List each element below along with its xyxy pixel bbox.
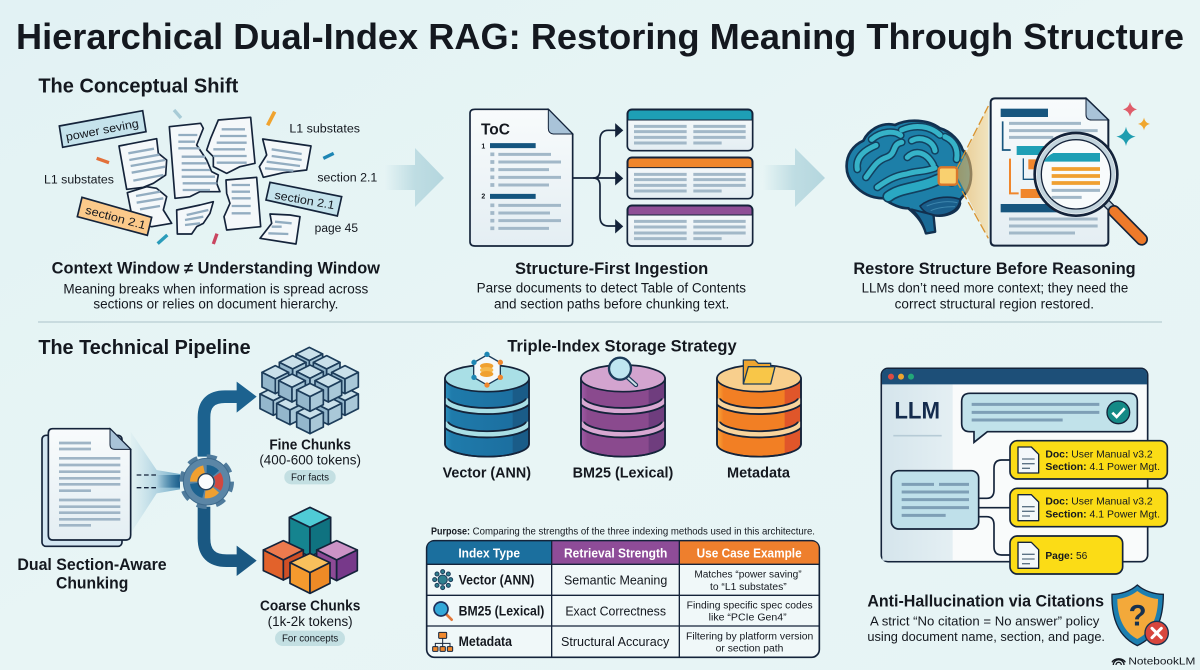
icon: source document: [42, 429, 131, 546]
citation card two: [1010, 488, 1167, 527]
beam from document to gear: [131, 432, 180, 533]
text: fine chunks: [259, 437, 361, 468]
zoom cone: [956, 106, 988, 238]
icon: vector network: [471, 352, 503, 388]
text: restore description: [862, 280, 1128, 311]
text: floating labels: [44, 121, 378, 235]
text: coarse chunks: (1k-2k tokens): [268, 614, 353, 629]
icon: llm window: LLM: [894, 397, 940, 424]
pill: for concepts: [275, 631, 345, 646]
text: context window description: [63, 281, 368, 312]
labels: database names: Metadata: [727, 465, 791, 481]
icon: llm window: [881, 368, 1148, 562]
text: context window description: Meaning breaks when information is spread across: [63, 281, 368, 296]
icon: table of contents document: 1: [481, 143, 485, 150]
icon: shield with question mark: [1112, 585, 1168, 646]
icon: coarse chunk cubes: [263, 507, 357, 593]
text: floating labels: section 2.1: [317, 170, 378, 184]
row: bm25: Exact Correctness: [565, 605, 666, 619]
pill: for facts: [284, 470, 336, 484]
heading: the technical pipeline: The Technical Pipeline: [38, 337, 251, 359]
text: context window description: sections or relies on document hierarchy.: [93, 297, 338, 312]
text: ingestion description: and section paths before chunking text.: [494, 296, 729, 311]
label: power seving: [59, 111, 146, 147]
arrow: shift to ingestion: [385, 148, 444, 207]
icon: magnifier: [609, 358, 636, 385]
text: restore description: LLMs don’t need more context; they need the: [862, 280, 1128, 295]
row: vector: [433, 570, 802, 593]
citation card one: [1010, 441, 1167, 479]
text: citation policy: using document name, section, and page.: [867, 630, 1105, 644]
text: dual section-aware chunking: Chunking: [56, 575, 128, 593]
row: metadata: Filtering by platform version: [686, 632, 813, 643]
text: citation policy: A strict “No citation = No answer” policy: [870, 615, 1100, 629]
text: fine chunks: (400-600 tokens): [259, 453, 361, 468]
icon: structured document with magnifier: [991, 98, 1142, 246]
label: section 2.1 orange: [77, 197, 152, 235]
labels: database names: Vector (ANN): [443, 465, 531, 481]
arrow: to fine chunks: [204, 382, 257, 457]
card: orange section: [627, 157, 753, 199]
text: floating labels: page 45: [315, 221, 358, 235]
dashed data flow: [137, 475, 180, 488]
label: power seving: power seving: [65, 117, 140, 144]
panel: citations: [867, 368, 1195, 667]
citation card two: Section: 4.1 Power Mgt.: [1045, 510, 1160, 521]
text: purpose note: Comparing the strengths of the three indexing methods used in this architecture.: [473, 526, 815, 537]
card: teal section: [627, 109, 753, 151]
row: vector: to “L1 substates”: [710, 582, 787, 593]
text: purpose note: Purpose:: [431, 526, 470, 537]
icon: fine chunk cubes: [260, 347, 358, 434]
text: ingestion description: Parse documents to detect Table of Contents: [477, 280, 746, 295]
citation card one: Doc: User Manual v3.2: [1045, 449, 1153, 460]
row: bm25: BM25 (Lexical): [459, 604, 544, 619]
heading: structure-first ingestion: Structure-First Ingestion: [515, 260, 708, 278]
pill: for concepts: For concepts: [282, 634, 338, 645]
label: section 2.1 blue: section 2.1: [273, 189, 335, 212]
text: restore description: correct structural region restored.: [895, 296, 1094, 311]
row: metadata: Metadata: [459, 634, 512, 649]
text: coarse chunks: Coarse Chunks: [260, 599, 360, 615]
panel: triple-index storage: [443, 338, 801, 481]
text: dual section-aware chunking: Dual Section-Aware: [17, 556, 167, 574]
title: Hierarchical Dual-Index RAG: Restoring Meaning Through Structure: [16, 16, 1184, 57]
arrow: ingestion to reasoning: [763, 148, 825, 207]
row: bm25: [434, 601, 813, 624]
icon: table of contents document: [470, 109, 573, 246]
row: vector: Matches “power saving”: [694, 570, 802, 581]
text: fine chunks: Fine Chunks: [269, 437, 351, 453]
icon: shield with question mark: ?: [1129, 600, 1147, 633]
logo: notebooklm: NotebookLM: [1128, 656, 1195, 667]
connectors: [979, 460, 1011, 555]
text: floating labels: L1 substates: [44, 172, 114, 186]
labels: database names: [443, 465, 791, 481]
icon: metadata database: [717, 365, 801, 457]
heading: the conceptual shift: The Conceptual Shift: [38, 76, 239, 98]
table body: [427, 541, 819, 657]
panel: restore structure: [847, 98, 1150, 311]
icon: vector database: [445, 365, 529, 457]
panel: context window: [38, 76, 380, 312]
row: metadata: [433, 632, 813, 655]
text: floating labels: L1 substates: [289, 121, 360, 135]
citation card three: [1010, 536, 1123, 574]
row: bm25: like “PCIe Gen4”: [709, 613, 787, 624]
decorative confetti marks: [97, 110, 334, 244]
table header: [427, 541, 819, 564]
icon: highlighted region: [939, 167, 957, 185]
row: vector: Vector (ANN): [459, 573, 534, 588]
row: bm25: Finding specific spec codes: [687, 601, 813, 612]
heading: context window: Context Window ≠ Understanding Window: [52, 259, 380, 277]
row: metadata: or section path: [716, 644, 783, 655]
panel: comparison table: [427, 526, 819, 657]
heading: triple-index storage strategy: Triple-Index Storage Strategy: [507, 338, 737, 356]
text: coarse chunks: [260, 599, 360, 629]
row: metadata: Structural Accuracy: [561, 635, 670, 649]
icon: sparkles: [1116, 102, 1150, 146]
icon: folder: [743, 360, 775, 384]
table header: Retrieval Strength: [564, 547, 667, 561]
text: ingestion description: [477, 280, 746, 311]
heading: restore structure: Restore Structure Before Reasoning: [853, 260, 1136, 278]
icon: brain: [847, 121, 971, 233]
card: purple section: [627, 205, 753, 246]
panel: structure-first ingestion: [470, 109, 753, 311]
citation card two: Doc: User Manual v3.2: [1045, 497, 1153, 508]
row: vector: Semantic Meaning: [564, 574, 667, 588]
text: citation policy: [867, 615, 1105, 644]
table header: Index Type: [458, 547, 520, 561]
chat bubble with check: [962, 393, 1137, 442]
arrows: branching connectors: [573, 125, 622, 232]
icon: table of contents document: 2: [481, 193, 485, 200]
text: dual section-aware chunking: [17, 556, 167, 593]
icon: gear: [183, 458, 231, 506]
answer box: [891, 471, 979, 529]
icon: torn document fragments: [119, 117, 311, 244]
citation card one: Section: 4.1 Power Mgt.: [1045, 462, 1160, 473]
table header: Use Case Example: [697, 547, 802, 561]
citation card three: Page: 56: [1045, 551, 1088, 562]
panel: technical pipeline: [17, 337, 361, 646]
label: section 2.1 orange: section 2.1: [84, 204, 147, 232]
icon: table of contents document: ToC: [481, 121, 510, 138]
heading: anti-hallucination: Anti-Hallucination via Citations: [867, 593, 1104, 611]
label: section 2.1 blue: [266, 182, 342, 216]
pill: for facts: For facts: [291, 472, 329, 483]
arrow: to coarse chunks: [204, 507, 257, 576]
icon: bm25 database: [581, 365, 665, 457]
labels: database names: BM25 (Lexical): [573, 465, 673, 481]
